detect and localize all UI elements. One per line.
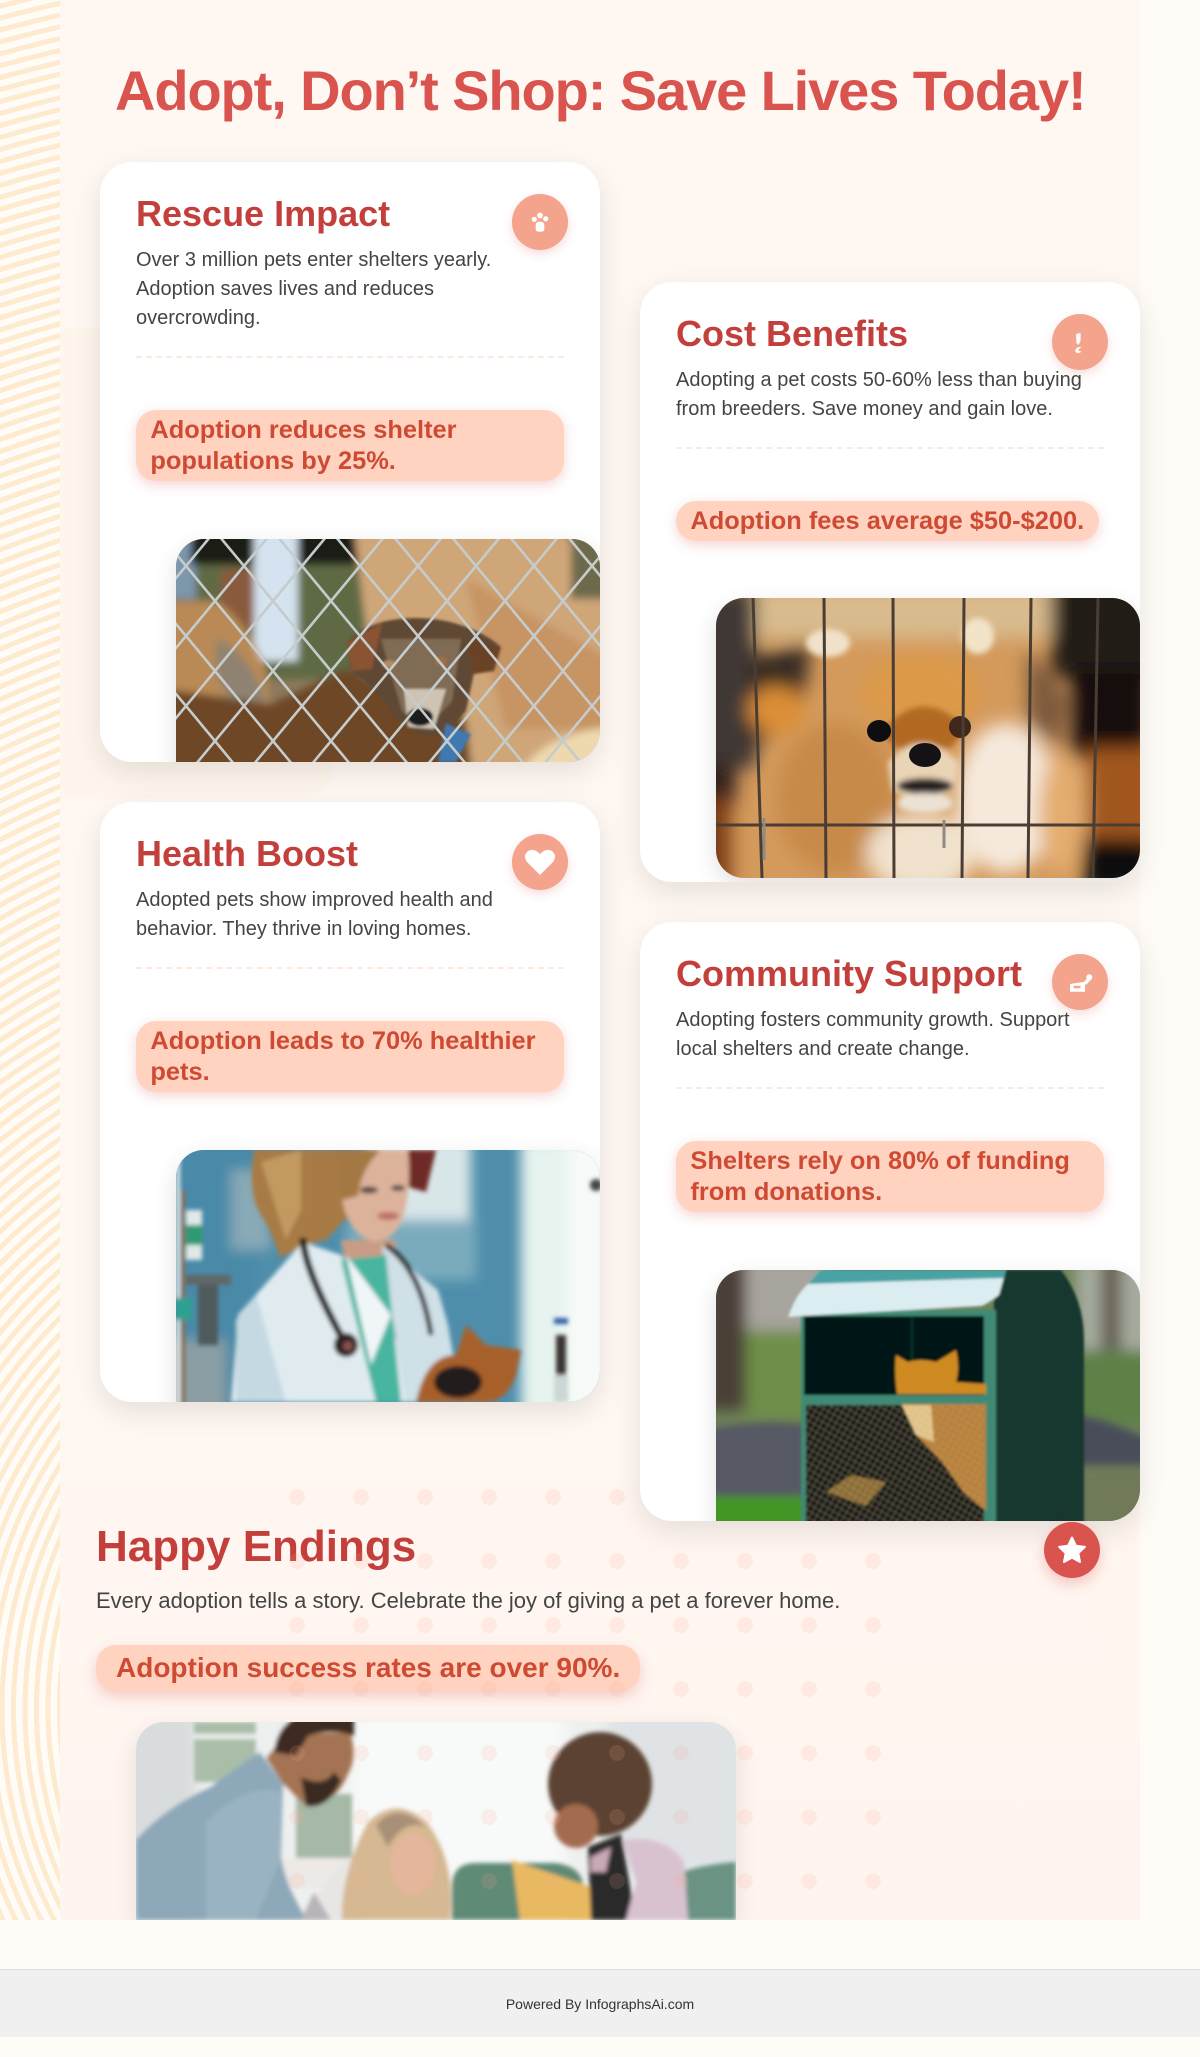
callout: success rate: Adoption success rates are over 90%. — [116, 1652, 620, 1683]
text: rescue impact body: Over 3 million pets enter shelters yearly. — [136, 249, 491, 271]
text: health boost body: Adopted pets show improved health and — [136, 889, 493, 911]
callout: shelter populations: populations by 25%. — [150, 447, 396, 475]
icon: donation box — [1052, 954, 1108, 1010]
callout: healthier pets: Adoption leads to 70% healthier — [150, 1027, 536, 1055]
image: pomeranian in cage — [716, 598, 1140, 878]
text: health boost body — [136, 889, 493, 940]
callout: funding donations: Shelters rely on 80% of funding — [690, 1147, 1070, 1175]
callout: success rate — [96, 1645, 640, 1691]
panel: rescue impact — [100, 162, 600, 762]
image: vet with dog — [176, 1150, 600, 1430]
text: community support body: Adopting fosters community growth. Support — [676, 1009, 1070, 1031]
panel: health boost — [100, 802, 600, 1402]
callout: adoption fees: Adoption fees average $50-$200. — [690, 507, 1084, 535]
text: community support body: local shelters and create change. — [676, 1038, 970, 1060]
text: rescue impact body: overcrowding. — [136, 307, 261, 329]
icon: coin mark — [1052, 314, 1108, 370]
text: health boost body: behavior. They thrive in loving homes. — [136, 918, 471, 940]
soft background shape left — [60, 328, 332, 798]
callout: shelter populations: Adoption reduces shelter — [150, 416, 457, 444]
panel: cost benefits — [640, 282, 1140, 882]
icon: heart — [512, 834, 568, 890]
text: cost benefits body — [676, 369, 1082, 420]
text: rescue impact body — [136, 249, 491, 329]
callout: healthier pets — [136, 1021, 564, 1092]
page title: Adopt, Don’t Shop: Save Lives Today! — [115, 59, 1086, 122]
heading: rescue impact: Rescue Impact — [136, 193, 390, 234]
footer: Powered By InfographsAi.com — [506, 1996, 694, 2012]
text: rescue impact body: Adoption saves lives and reduces — [136, 278, 434, 300]
callout: funding donations: from donations. — [690, 1178, 882, 1206]
star icon — [1044, 1522, 1100, 1578]
callout: adoption fees — [676, 501, 1099, 541]
footer — [0, 1969, 1200, 2037]
background stripe band — [0, 0, 60, 1920]
soft circle bottom right — [1070, 1340, 1200, 1740]
callout: funding donations — [676, 1141, 1104, 1212]
heading: health boost: Health Boost — [136, 833, 358, 874]
dot grid overlay — [289, 1489, 881, 1889]
image: family with pet — [136, 1722, 736, 1920]
callout: healthier pets: pets. — [150, 1058, 210, 1086]
icon: paw — [512, 194, 568, 250]
text: happy endings body: Every adoption tells a story. Celebrate the joy of giving a pet a forever home. — [96, 1588, 840, 1613]
heading: cost benefits: Cost Benefits — [676, 313, 908, 354]
text: community support body — [676, 1009, 1070, 1060]
happy endings section background — [60, 1480, 1140, 1920]
text: cost benefits body: Adopting a pet costs 50-60% less than buying — [676, 369, 1082, 391]
panel: community support — [640, 922, 1140, 1521]
section: happy endings — [90, 1522, 840, 1920]
image: cat in shelter box — [716, 1270, 1140, 1550]
heading: happy endings: Happy Endings — [96, 1522, 416, 1571]
text: cost benefits body: from breeders. Save money and gain love. — [676, 398, 1053, 420]
heading: community support: Community Support — [676, 953, 1022, 994]
callout: shelter populations — [136, 410, 564, 481]
image: dogs behind chain-link fence — [176, 539, 600, 799]
